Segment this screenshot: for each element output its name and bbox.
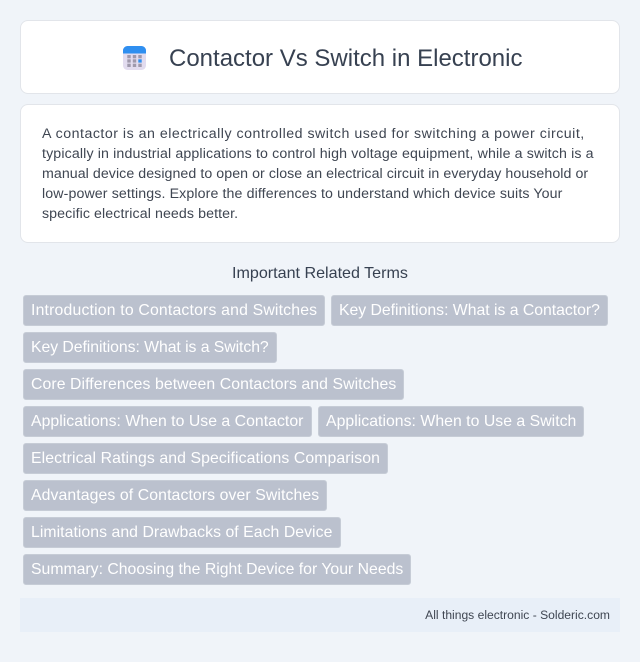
- tag: [23, 517, 341, 548]
- description text: manual device designed to open or close an electrical circuit in everyday household or: [42, 166, 588, 182]
- footer bar: [20, 598, 620, 632]
- title: Contactor Vs Switch in Electronic: [169, 45, 522, 72]
- tag: [331, 295, 608, 326]
- panel: description: [20, 104, 620, 243]
- tag: [318, 406, 584, 437]
- tag: Introduction to Contactors and Switches: [31, 302, 317, 319]
- tag: [23, 480, 327, 511]
- tag: [23, 295, 325, 326]
- tag: [23, 443, 388, 474]
- tag: Limitations and Drawbacks of Each Device: [31, 524, 332, 541]
- tag: Core Differences between Contactors and Switches: [31, 376, 396, 393]
- tag: Key Definitions: What is a Contactor?: [339, 302, 600, 319]
- tag: Advantages of Contactors over Switches: [31, 487, 319, 504]
- tag: Applications: When to Use a Contactor: [31, 413, 303, 430]
- tag: Applications: When to Use a Switch: [326, 413, 576, 430]
- heading: related terms: Important Related Terms: [232, 264, 408, 282]
- footer text: All things electronic - Solderic.com: [425, 608, 610, 622]
- description text: typically in industrial applications to control high voltage equipment, while a switch is a: [42, 146, 594, 162]
- tag: [23, 554, 411, 585]
- tag: [23, 332, 277, 363]
- description text: A contactor is an electrically controlled switch used for switching a power circuit,: [42, 126, 585, 142]
- tag: [23, 369, 404, 400]
- tag: Summary: Choosing the Right Device for Your Needs: [31, 561, 403, 578]
- tag: Electrical Ratings and Specifications Comparison: [31, 450, 380, 467]
- icon: calendar: [123, 46, 146, 70]
- panel: title card: [20, 20, 620, 94]
- description text: specific electrical needs better.: [42, 206, 238, 222]
- description text: low-power settings. Explore the differences to understand which device suits Your: [42, 186, 562, 202]
- tag: [23, 406, 312, 437]
- description text: [42, 126, 594, 222]
- panel: related term tags: [23, 295, 608, 585]
- tag: Key Definitions: What is a Switch?: [31, 339, 269, 356]
